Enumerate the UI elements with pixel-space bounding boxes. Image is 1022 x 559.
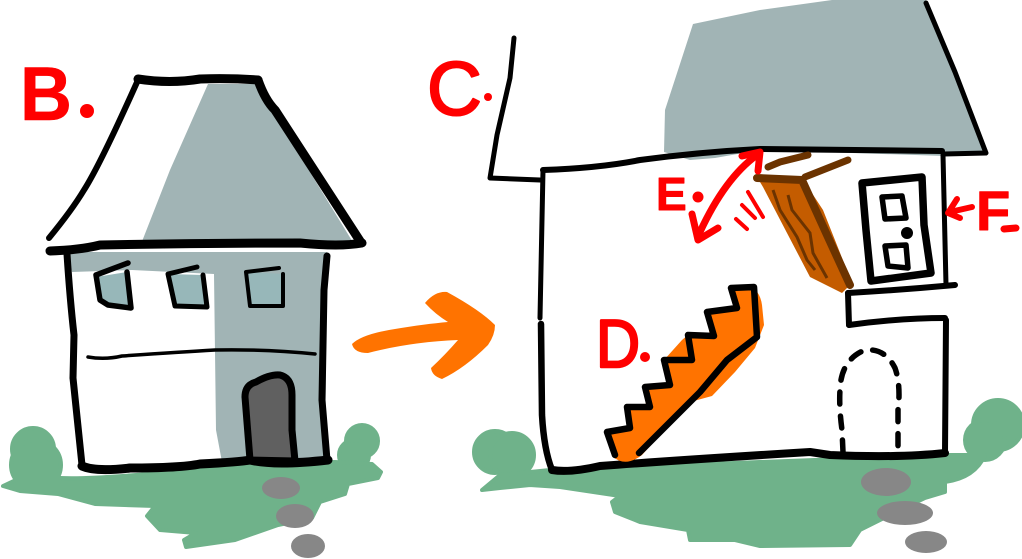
roof outline C bbox=[490, 3, 986, 180]
floating upper door bbox=[862, 177, 931, 281]
stepping stones C bbox=[861, 468, 947, 553]
label E with double-headed movement arrow bbox=[656, 152, 763, 240]
label F with pointer arrow bbox=[948, 179, 1016, 242]
label F with pointer arrow: F bbox=[976, 179, 1010, 242]
label D: D bbox=[596, 306, 640, 382]
grass under house B bbox=[3, 425, 381, 547]
roof outline B bbox=[49, 79, 362, 251]
roof shading C bbox=[664, 0, 987, 160]
staircase bbox=[607, 285, 764, 462]
label E with double-headed movement arrow: E bbox=[656, 168, 687, 220]
grass under house C bbox=[474, 400, 1022, 546]
wall shading B bbox=[68, 252, 327, 462]
door B bbox=[245, 375, 295, 461]
walls C bbox=[540, 155, 946, 471]
dashed old doorway bbox=[840, 350, 899, 452]
fallen wooden beam bbox=[757, 155, 852, 293]
house B: intact exterior bbox=[3, 79, 381, 558]
upper floor ledge bbox=[848, 285, 955, 325]
house C: damaged interior bbox=[474, 0, 1022, 553]
label C: C bbox=[427, 47, 482, 132]
roof shading B bbox=[141, 84, 354, 244]
windows B bbox=[96, 263, 283, 308]
walls B bbox=[67, 254, 328, 470]
arrow: before to after bbox=[352, 292, 495, 379]
label B: B bbox=[20, 52, 72, 137]
stepping stones B bbox=[262, 477, 325, 558]
